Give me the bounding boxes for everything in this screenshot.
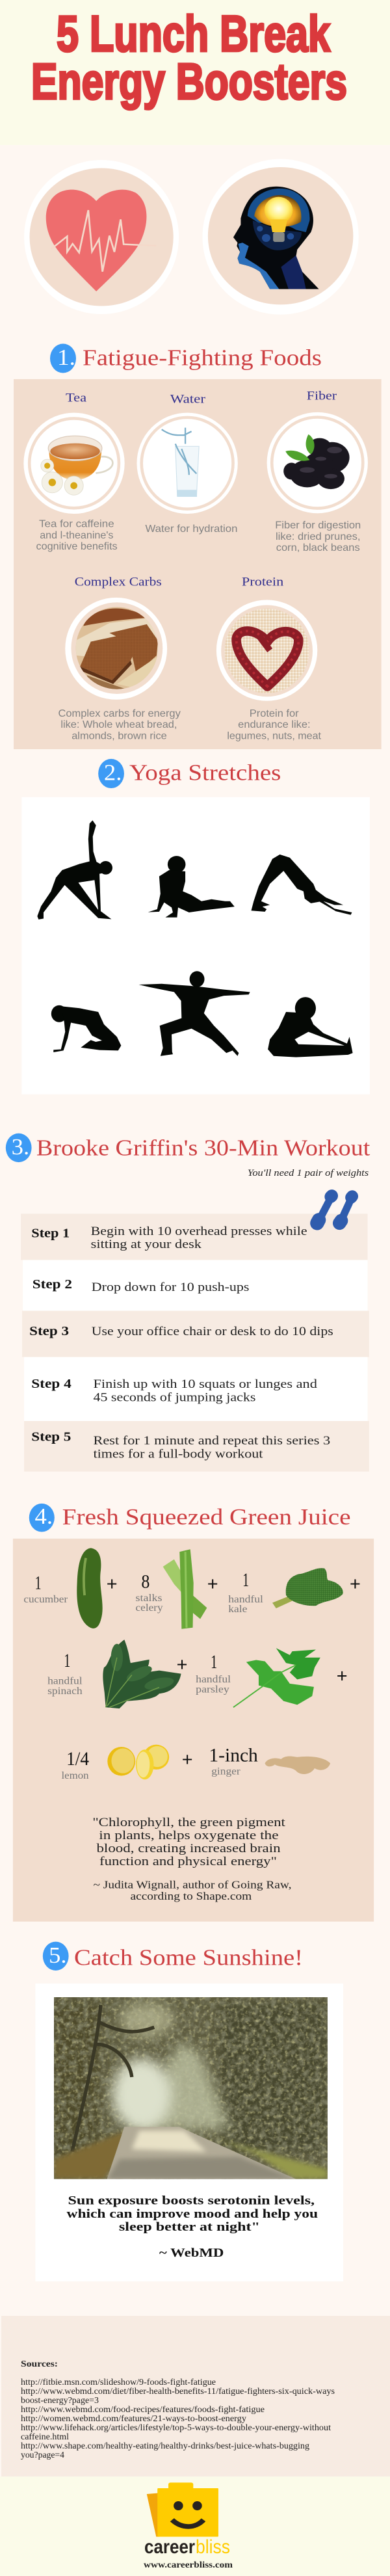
- food item: tea: Tea: [66, 391, 87, 405]
- section: yoga stretches: [21, 759, 370, 1095]
- panel: sources: http://women.webmd.com/features/21-ways-to-boost-energy: [21, 2413, 246, 2423]
- plus: +: [207, 1574, 218, 1595]
- quote attribution: ~ Judita Wignall, author of Going Raw,: [93, 1879, 291, 1891]
- ingredient: kale: 1: [242, 1570, 249, 1591]
- food item: complex carbs: like: Whole wheat bread,: [60, 719, 177, 730]
- food item: complex carbs: Complex carbs for energy: [58, 708, 181, 719]
- pose: triangle: [37, 820, 112, 920]
- ingredient: lemon: [62, 1745, 169, 1781]
- ingredient: kale: kale: [228, 1604, 248, 1615]
- step 3: [22, 1311, 369, 1357]
- quote: chlorophyll: [92, 1816, 286, 1868]
- step 1: Begin with 10 overhead presses while: [91, 1225, 307, 1238]
- step 2: [23, 1260, 368, 1311]
- step 4: Finish up with 10 squats or lunges and: [93, 1377, 317, 1391]
- section: workout: [6, 1134, 370, 1472]
- step 2: Step 2: [32, 1277, 72, 1292]
- step 5: [24, 1421, 369, 1472]
- food item: complex carbs: Complex Carbs: [75, 576, 162, 589]
- website: www.careerbliss.com: [144, 2560, 233, 2570]
- pose: warrior: [139, 971, 250, 1056]
- heading 3: Brooke Griffin's 30-Min Workout: [36, 1135, 370, 1160]
- panel: juice recipe: [13, 1539, 374, 1922]
- title: [31, 5, 347, 110]
- food item: protein: [216, 576, 322, 741]
- plus: +: [337, 1666, 348, 1687]
- panel: sources: http://www.webmd.com/food-recipes/features/foods-fight-fatigue: [21, 2404, 265, 2414]
- ingredient: ginger: [209, 1746, 330, 1777]
- food item: protein: Protein for: [250, 708, 299, 719]
- pose: cobra: [148, 856, 235, 918]
- food item: water: [136, 392, 238, 535]
- plus: +: [177, 1654, 188, 1675]
- caption: sun exposure: sleep better at night": [119, 2220, 260, 2234]
- ingredient: kale: [228, 1568, 343, 1615]
- ingredient: parsley: 1: [211, 1652, 217, 1673]
- food item: tea: cognitive benefits: [36, 541, 118, 552]
- food item: protein: endurance like:: [238, 719, 311, 730]
- logo wordmark: career: career: [144, 2536, 195, 2558]
- caption: sun exposure: [67, 2194, 318, 2260]
- icon: dumbbells: [317, 1196, 352, 1223]
- heading 4: Fresh Squeezed Green Juice: [62, 1504, 351, 1530]
- step 4: Step 4: [31, 1377, 72, 1391]
- ingredient: cucumber: cucumber: [23, 1594, 68, 1605]
- panel: sunshine: [35, 1984, 343, 2281]
- ingredient: cucumber: [23, 1548, 103, 1628]
- panel: sources: http://www.shape.com/healthy-eating/healthy-drinks/best-juice-whats-bugging: [21, 2441, 309, 2450]
- ingredient: kale: handful: [228, 1594, 263, 1605]
- logo wordmark: bliss: bliss: [196, 2536, 230, 2558]
- heading 2: 2.: [104, 760, 122, 785]
- icon: heart with pulse: [24, 160, 179, 314]
- plus: +: [350, 1574, 361, 1595]
- step 5: Rest for 1 minute and repeat this series 3: [93, 1434, 330, 1448]
- step 5: times for a full-body workout: [93, 1447, 263, 1461]
- panel: yoga poses: [21, 797, 370, 1095]
- food item: fiber: Fiber: [307, 389, 337, 403]
- heading 5: Catch Some Sunshine!: [74, 1945, 303, 1971]
- step 4: [24, 1357, 368, 1421]
- panel: sources: http://fitbie.msn.com/slideshow/9-foods-fight-fatigue: [21, 2377, 216, 2387]
- food item: fiber: Fiber for digestion: [275, 520, 361, 531]
- ingredient: ginger: ginger: [211, 1766, 240, 1777]
- quote: chlorophyll: "Chlorophyll, the green pigment: [92, 1816, 286, 1829]
- heading 1: [50, 343, 322, 373]
- food item: complex carbs: almonds, brown rice: [72, 730, 167, 741]
- ingredient: parsley: handful: [196, 1674, 231, 1685]
- quote attribution: according to Shape.com: [131, 1890, 252, 1902]
- panel: sources: http://www.lifehack.org/articles/lifestyle/top-5-ways-to-double-your-energy-without: [21, 2423, 331, 2432]
- quote: chlorophyll: in plants, helps oxygenate the: [99, 1829, 279, 1842]
- food item: protein: Protein: [242, 576, 284, 589]
- ingredient: celery: celery: [136, 1602, 163, 1613]
- ingredient: spinach: 1: [64, 1651, 70, 1671]
- food item: complex carbs: [58, 576, 181, 741]
- pose: downward dog: [251, 855, 352, 915]
- ingredient: parsley: [196, 1648, 320, 1707]
- ingredient: parsley: parsley: [196, 1684, 229, 1695]
- heading 1: 1.: [57, 345, 75, 370]
- quote: chlorophyll: function and physical energy": [99, 1855, 277, 1868]
- logo icon: smiling folder: [147, 2482, 218, 2537]
- plus: +: [182, 1749, 193, 1770]
- top header band: [0, 0, 390, 145]
- ingredient: spinach: [47, 1640, 181, 1708]
- step 3: Use your office chair or desk to do 10 dips: [92, 1325, 333, 1338]
- photo: sunlit forest road: [50, 1997, 328, 2179]
- ingredient: cucumber: 1: [35, 1573, 42, 1593]
- step 5: Step 5: [31, 1429, 71, 1444]
- section: sunshine: [35, 1879, 343, 2281]
- step 1: sitting at your desk: [91, 1238, 202, 1251]
- pose: cat: [51, 1005, 121, 1052]
- ingredient: spinach: spinach: [47, 1686, 83, 1697]
- food item: water: Water: [170, 392, 206, 406]
- step 2: Drop down for 10 push-ups: [92, 1281, 249, 1294]
- ingredient: celery: 8: [141, 1572, 150, 1593]
- logo: careerbliss: [144, 2482, 233, 2570]
- food item: protein: legumes, nuts, meat: [227, 730, 322, 741]
- heading 1: Fatigue-Fighting Foods: [83, 345, 322, 371]
- heading 4: 4.: [35, 1504, 53, 1529]
- pose: seated forward bend: [268, 997, 353, 1057]
- caption: sun exposure: ~ WebMD: [159, 2246, 224, 2260]
- panel: sources: [1, 2316, 390, 2476]
- caption: sun exposure: which can improve mood and help you: [67, 2207, 318, 2221]
- food item: tea: [23, 391, 125, 552]
- icon: head with light bulb: [202, 159, 359, 315]
- panel: sources: you?page=4: [21, 2450, 64, 2460]
- panel: sources: http://www.webmd.com/diet/fiber-health-benefits-11/fatigue-fighters-six-quick-ways: [21, 2386, 335, 2396]
- quote attribution: [93, 1879, 291, 1902]
- step 4: 45 seconds of jumping jacks: [93, 1390, 255, 1404]
- panel: sources: caffeine.html: [21, 2432, 69, 2441]
- panel: fatigue-fighting foods: [14, 379, 382, 749]
- food item: water: Water for hydration: [145, 524, 237, 535]
- ingredient: ginger: 1-inch: [209, 1746, 258, 1766]
- panel: sources: boost-energy?page=3: [21, 2395, 99, 2405]
- heading 2: Yoga Stretches: [129, 760, 281, 785]
- section: green juice: [13, 1504, 374, 1922]
- food item: fiber: corn, black beans: [276, 542, 360, 553]
- quote: chlorophyll: blood, creating increased brain: [96, 1842, 281, 1855]
- footer band: [0, 2476, 390, 2576]
- food item: fiber: [267, 389, 368, 553]
- heading 3: 3.: [12, 1134, 29, 1160]
- heading 2: [98, 759, 281, 788]
- ingredient: lemon: 1/4: [66, 1749, 89, 1770]
- ingredient: celery: stalks: [136, 1593, 162, 1604]
- note: weights: You'll need 1 pair of weights: [248, 1168, 369, 1178]
- ingredient: lemon: lemon: [62, 1770, 89, 1781]
- food item: tea: and l-theanine's: [40, 530, 114, 541]
- caption: sun exposure: Sun exposure boosts serotonin levels,: [68, 2194, 315, 2208]
- heading 5: 5.: [49, 1943, 67, 1968]
- step 3: Step 3: [29, 1324, 69, 1338]
- food item: tea: Tea for caffeine: [39, 519, 114, 530]
- step 1: Step 1: [31, 1227, 70, 1241]
- plus: +: [107, 1574, 118, 1595]
- step 1: [21, 1214, 368, 1260]
- ingredient: spinach: handful: [47, 1676, 83, 1687]
- panel: sources: Sources:: [21, 2359, 58, 2369]
- food item: fiber: like: dried prunes,: [276, 531, 360, 542]
- ingredient: celery: [136, 1549, 207, 1629]
